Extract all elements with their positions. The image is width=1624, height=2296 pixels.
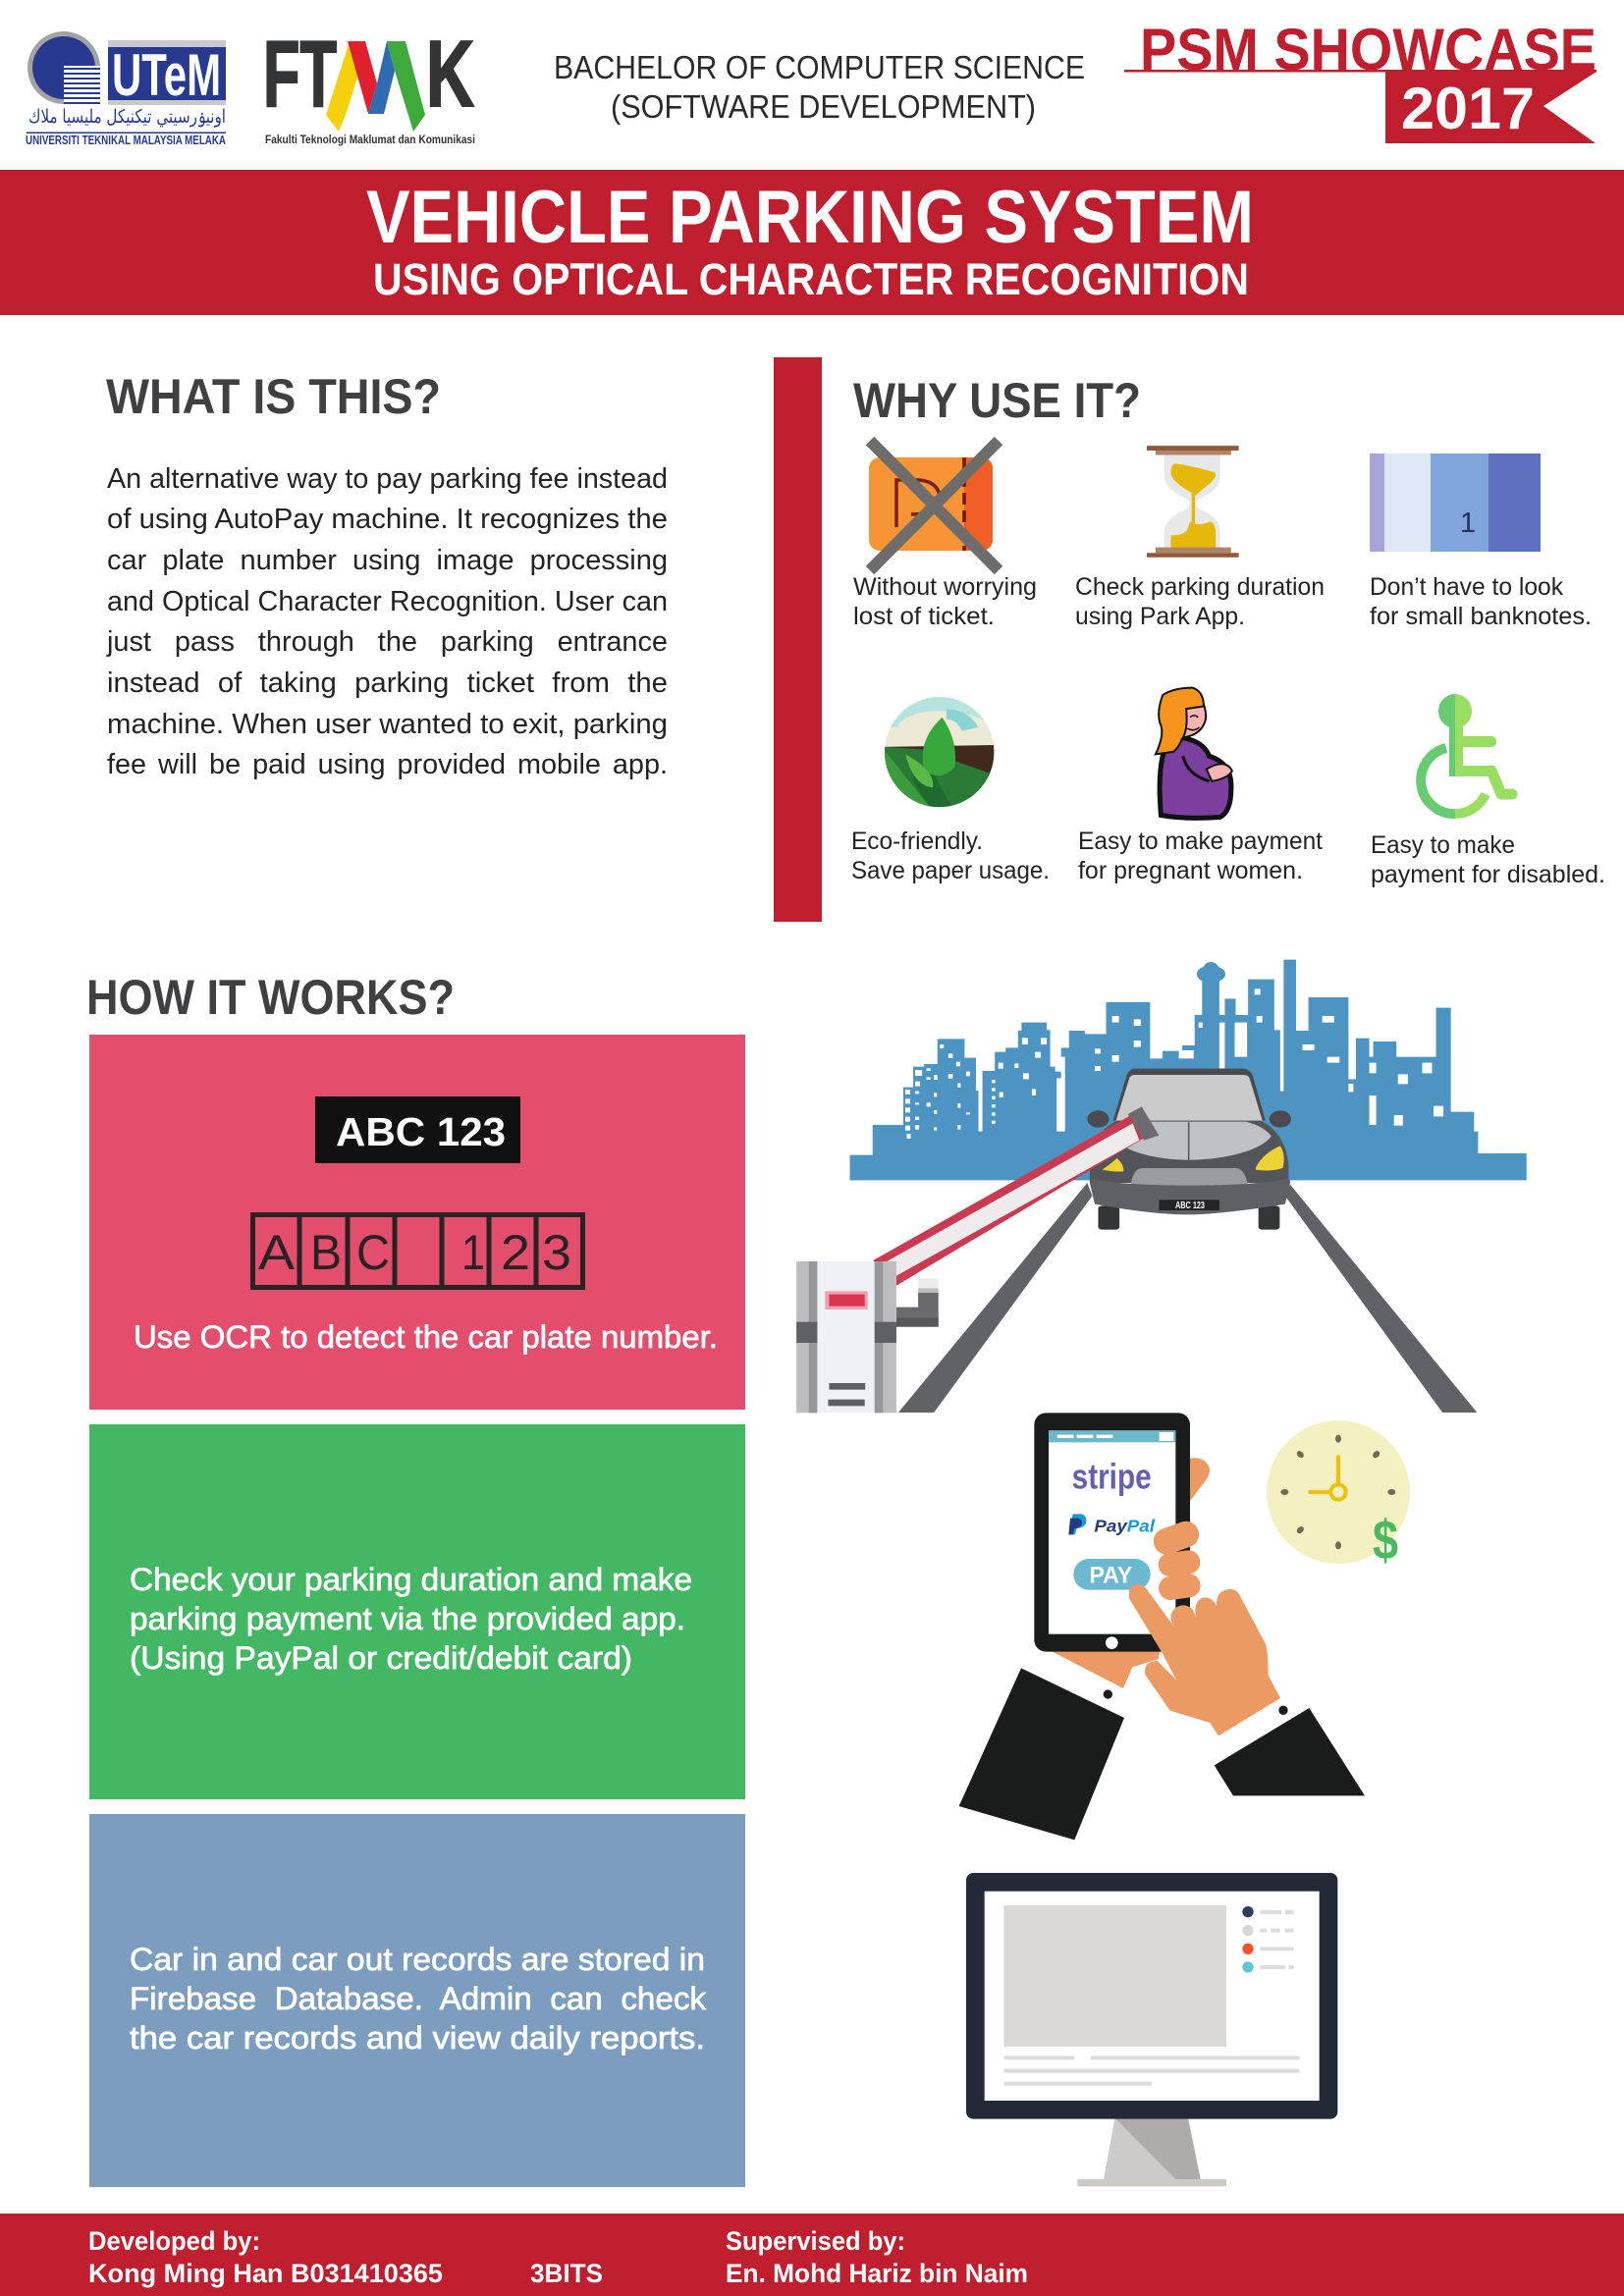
PSM Showcase banner: PSM SHOWCASE — [1140, 17, 1597, 82]
panel: what is this: fee will be paid using provided mobile app. — [107, 749, 668, 780]
car: ABC 123 — [1175, 1201, 1205, 1211]
divider bar: why use it — [774, 357, 822, 922]
title band — [0, 170, 1624, 315]
illustration: city, road, car and parking barrier — [796, 960, 1527, 1413]
character segmentation grid: A — [258, 1225, 296, 1280]
sleeves — [959, 1668, 1365, 1840]
footer band — [0, 2214, 1624, 2296]
footer band: Supervised by: — [726, 2226, 905, 2256]
icon: banknotes — [1370, 454, 1541, 552]
icon: hourglass — [1147, 446, 1239, 558]
panel: what is this: machine. When user wanted to exit, parking — [107, 709, 668, 740]
logo: FTMK: K — [426, 22, 474, 127]
phone: stripe — [1072, 1457, 1152, 1497]
illustration: admin monitor — [966, 1873, 1337, 2186]
panel: step 2 payment: (Using PayPal or credit/debit card) — [130, 1640, 632, 1676]
panel: step 2 payment: parking payment via the provided app. — [130, 1601, 685, 1636]
programme name — [554, 49, 1085, 125]
car — [1087, 1069, 1291, 1230]
panel: step 3 records: the car records and view daily reports. — [130, 2020, 705, 2056]
logo: UTeM — [26, 31, 226, 147]
caption: ticket: Without worrying — [853, 573, 1037, 601]
character segmentation grid: C — [356, 1225, 390, 1280]
caption: pregnant women — [1078, 828, 1323, 884]
licence plate: ABC 123 — [336, 1109, 506, 1154]
logo: FTMK: Fakulti Teknologi Maklumat dan Komunikasi — [265, 134, 475, 146]
panel: step 2 payment — [89, 1424, 745, 1799]
logo: FTMK — [263, 22, 475, 146]
caption: eco-friendly: Save paper usage. — [851, 857, 1050, 884]
caption: eco-friendly: Eco-friendly. — [851, 828, 983, 855]
heading: why use it: WHY USE IT? — [853, 373, 1141, 428]
character segmentation grid: 1 — [461, 1225, 485, 1280]
footer band: En. Mohd Hariz bin Naim — [726, 2259, 1028, 2288]
panel: step 1 OCR: Use OCR to detect the car plate number. — [134, 1319, 718, 1355]
caption: banknotes — [1370, 573, 1592, 630]
panel: what is this: WHAT IS THIS? — [106, 369, 441, 424]
caption: hourglass: Check parking duration — [1075, 573, 1325, 601]
phone — [1034, 1413, 1190, 1652]
heading: how it works: HOW IT WORKS? — [86, 970, 455, 1025]
phone: PayPal — [1094, 1517, 1156, 1536]
caption: banknotes: for small banknotes. — [1370, 603, 1592, 630]
panel: what is this: An alternative way to pay parking fee instead — [107, 463, 668, 495]
icon: clock with dollar sign — [1267, 1420, 1410, 1573]
holding palm — [1048, 1458, 1210, 1688]
panel: step 2 payment: Check your parking duration and make — [130, 1562, 692, 1597]
phone: PAY — [1089, 1563, 1132, 1589]
footer band: Kong Ming Han B031410365 — [88, 2259, 443, 2288]
programme name: BACHELOR OF COMPUTER SCIENCE — [554, 49, 1085, 85]
caption: disabled: Easy to make — [1371, 831, 1515, 859]
character segmentation grid: 2 — [501, 1225, 530, 1280]
panel: step 3 records: Car in and car out records are stored in — [130, 1942, 705, 1977]
panel: what is this — [106, 369, 668, 780]
icon: wheelchair — [1421, 694, 1512, 814]
PSM Showcase banner: 2017 — [1401, 76, 1535, 141]
programme name: (SOFTWARE DEVELOPMENT) — [611, 88, 1036, 125]
caption: ticket: lost of ticket. — [853, 603, 995, 630]
logo: UTeM: UNIVERSITI TEKNIKAL MALAYSIA MELAKA — [26, 133, 226, 147]
footer band: Developed by: — [88, 2226, 260, 2256]
logo: UTeM: اونيۏرسيتي تيكنيكل مليسيا ملاك — [28, 106, 226, 128]
character segmentation grid: B — [310, 1225, 342, 1280]
caption: pregnant women: Easy to make payment — [1078, 828, 1323, 855]
icon: pregnant woman — [1156, 688, 1232, 818]
licence plate — [315, 1096, 520, 1163]
caption: disabled — [1371, 831, 1605, 888]
PSM Showcase banner — [1124, 17, 1597, 143]
caption: eco-friendly — [851, 828, 1050, 884]
icon: clock with dollar sign: $ — [1373, 1511, 1398, 1573]
barrier arm and gate — [796, 1106, 1159, 1413]
character segmentation grid: 3 — [542, 1225, 571, 1280]
title band: VEHICLE PARKING SYSTEM — [366, 176, 1254, 259]
footer band: 3BITS — [530, 2259, 603, 2288]
caption: hourglass: using Park App. — [1075, 603, 1245, 630]
panel: step 1 OCR — [89, 1035, 745, 1410]
city skyline — [850, 960, 1527, 1180]
caption: disabled: payment for disabled. — [1371, 861, 1605, 888]
panel: step 3 records: Firebase Database. Admin can check — [130, 1981, 707, 2016]
panel: what is this: just pass through the parking entrance — [106, 626, 668, 658]
title band: USING OPTICAL CHARACTER RECOGNITION — [373, 254, 1249, 304]
panel: what is this: instead of taking parking ticket from the — [107, 667, 668, 699]
illustration: hands holding phone with payment app — [959, 1413, 1365, 1840]
caption: pregnant women: for pregnant women. — [1078, 857, 1303, 884]
caption: banknotes: Don’t have to look — [1370, 573, 1563, 601]
logo: FTMK: FT — [263, 22, 337, 127]
logo: UTeM: UTeM — [112, 42, 221, 108]
caption: ticket — [853, 573, 1037, 630]
icon: eco-friendly leaf — [885, 697, 994, 807]
fingers and pointing hand — [1129, 1518, 1280, 1735]
icon: crossed-out parking ticket — [869, 441, 999, 570]
panel: what is this: of using AutoPay machine. It recognizes the — [107, 504, 668, 535]
caption: hourglass — [1075, 573, 1325, 630]
panel: what is this: and Optical Character Recognition. User can — [107, 586, 668, 617]
icon: banknotes: 1 — [1460, 507, 1476, 539]
road — [898, 1183, 1477, 1413]
character segmentation grid — [253, 1214, 583, 1288]
panel: step 3 records — [89, 1814, 745, 2187]
panel: what is this: car plate number using image processing — [107, 545, 668, 576]
